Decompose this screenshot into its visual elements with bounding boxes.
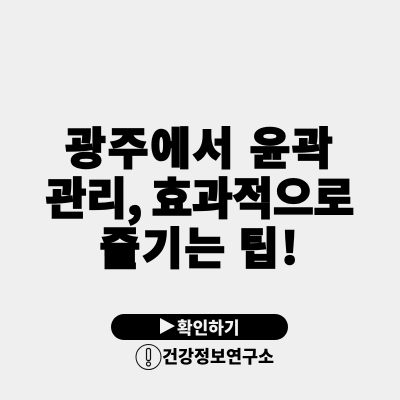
button label: 확인하기 — [177, 314, 240, 339]
title: 광주에서 윤곽 — [65, 113, 335, 177]
title: 관리, 효과적으로 — [46, 163, 354, 227]
title — [46, 113, 354, 277]
icon: exclamation in circle — [136, 344, 162, 370]
brand name: 건강정보연구소 — [162, 344, 274, 369]
button: confirm — [111, 314, 288, 340]
icon: play triangle — [160, 318, 175, 334]
title: 즐기는 팁! — [100, 213, 300, 277]
